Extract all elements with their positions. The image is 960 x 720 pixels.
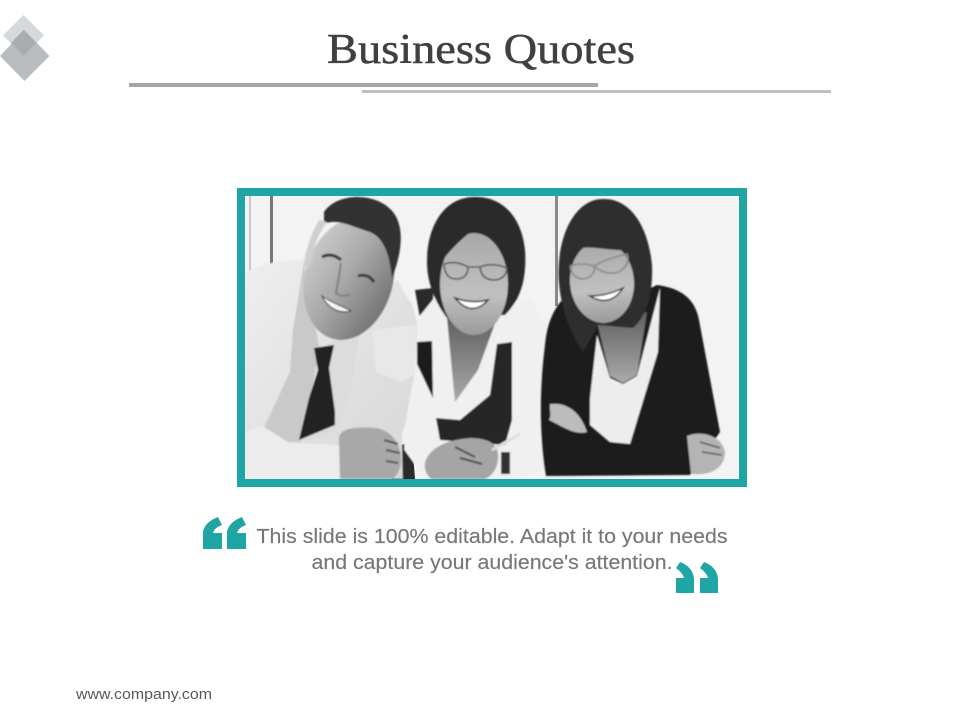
quote text: This slide is 100% editable. Adapt it to your needs: [256, 526, 728, 548]
quote text: [256, 526, 728, 574]
footer url: www.company.com: [75, 686, 212, 703]
middle woman: [403, 196, 526, 479]
right woman: [541, 199, 725, 476]
logo: overlapping diamonds: [0, 15, 50, 81]
title underline: offset double rule: [129, 83, 831, 93]
dark gap between man and woman: [392, 440, 415, 479]
man: [245, 197, 419, 479]
title: Business Quotes: [327, 27, 635, 73]
photo frame: [237, 188, 747, 487]
quote text: and capture your audience's attention.: [312, 552, 672, 574]
icon: closing quotation mark: [676, 562, 718, 593]
icon: opening quotation mark: [203, 517, 246, 549]
photo: three smiling business people: [245, 196, 739, 479]
